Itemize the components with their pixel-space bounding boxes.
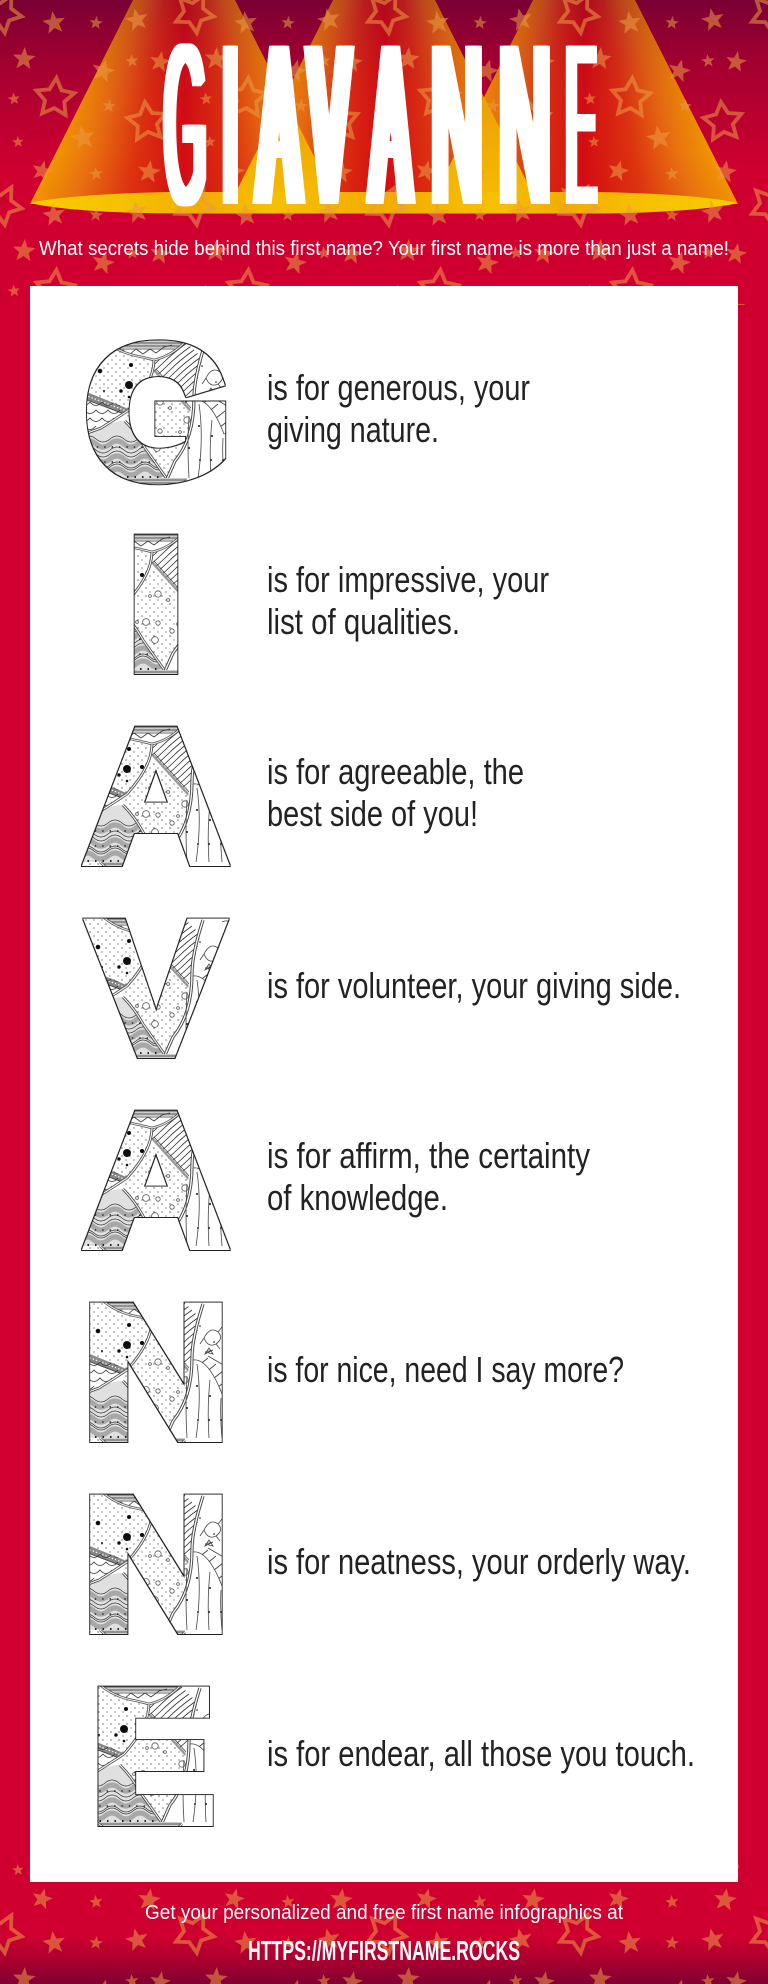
footer text (145, 1902, 623, 1966)
letter N: N (82, 1459, 230, 1669)
spotlight: middle cone (238, 0, 484, 192)
title: V (303, 0, 342, 253)
text: A meaning (267, 1135, 590, 1218)
text: G meaning: giving nature. (267, 409, 439, 450)
row: V (90, 883, 681, 1093)
text: I meaning (267, 559, 549, 642)
text: N meaning: is for nice, need I say more? (267, 1349, 624, 1390)
row: N second (82, 1459, 691, 1669)
letter A: A (84, 691, 228, 901)
spotlight: left cone (30, 0, 268, 204)
title: G (160, 0, 202, 253)
text: A meaning (267, 751, 524, 834)
text: I meaning: list of qualities. (267, 601, 460, 642)
text: A meaning: is for agreeable, the (267, 751, 524, 792)
text: G meaning: is for generous, your (267, 367, 530, 408)
title: N (426, 0, 476, 253)
spotlights (30, 0, 738, 214)
footer url: HTTPS://MYFIRSTNAME.ROCKS (248, 1935, 520, 1966)
letter E: E (91, 1651, 215, 1861)
letter G: G (87, 310, 229, 514)
letter N: N (82, 1267, 230, 1477)
letter I: I (126, 499, 186, 709)
title: I (217, 0, 234, 253)
text: V meaning: is for volunteer, your giving side. (267, 965, 681, 1006)
text: G meaning (267, 367, 530, 450)
title: A (252, 0, 292, 253)
title: E (562, 0, 593, 253)
text: A meaning: of knowledge. (267, 1177, 448, 1218)
row: I (126, 499, 549, 709)
title (160, 0, 598, 253)
subtitle: What secrets hide behind this first name? Your first name is more than just a name! (39, 238, 729, 260)
row: A (84, 691, 524, 901)
row: G (87, 310, 530, 514)
letter V: V (90, 883, 222, 1093)
row: A second (84, 1075, 590, 1285)
panel: white card with letter rows (30, 286, 738, 1882)
text: A meaning: is for affirm, the certainty (267, 1135, 590, 1176)
title: A (365, 0, 403, 253)
row: N (82, 1267, 624, 1477)
text: A meaning: best side of you! (267, 793, 478, 834)
spotlight overlaps and floor pool (30, 98, 738, 214)
letter A: A (84, 1075, 228, 1285)
footer line: Get your personalized and free first name infographics at (145, 1902, 623, 1924)
title: N (494, 0, 544, 253)
text: I meaning: is for impressive, your (267, 559, 549, 600)
row: E (91, 1651, 695, 1861)
letters and meanings (80, 339, 692, 1961)
spotlight: right cone (448, 0, 738, 204)
